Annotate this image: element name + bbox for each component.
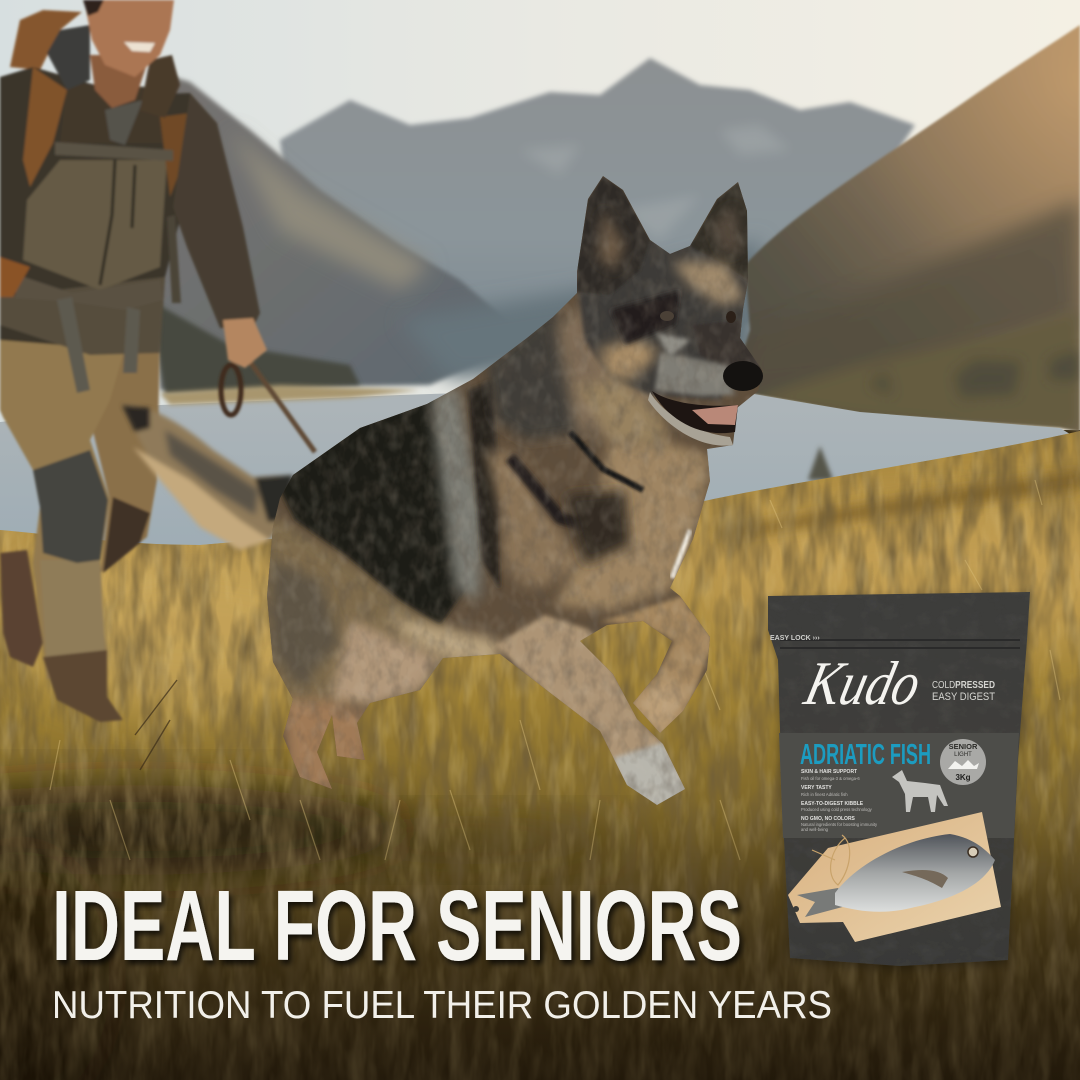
left shoreline trees [150, 300, 360, 395]
dark seed heads [135, 680, 177, 770]
shoulder dark [487, 310, 590, 440]
tail tip dark [122, 405, 150, 432]
right mountain [730, 20, 1080, 435]
head [84, 0, 174, 77]
leash [243, 352, 315, 452]
cheek tan [597, 338, 660, 380]
lower lip [648, 392, 733, 446]
knee pad [33, 450, 108, 563]
benefit 1 detail: Fish oil for omega-3 & omega-6 [801, 776, 860, 781]
lower left dark [0, 850, 110, 1080]
benefit 2: VERY TASTY [801, 785, 832, 791]
front leg [0, 330, 130, 680]
grey cheek [655, 332, 690, 358]
headline: IDEAL FOR SENIORS [52, 870, 742, 982]
easy digest tagline: EASY DIGEST [932, 691, 995, 703]
right ear inner [712, 205, 740, 255]
body base [250, 170, 780, 810]
distant mountains [280, 58, 915, 380]
benefit 3 detail: Produced using cold press technology [801, 807, 873, 812]
Kudo logo: Kudo [798, 649, 928, 718]
far ridge shadow [720, 470, 1080, 540]
smile [124, 42, 155, 52]
product pouch: Kudo Adriatic Fish [760, 590, 1035, 970]
neck [90, 55, 150, 108]
hind lower legs [283, 700, 368, 795]
collar [570, 432, 643, 490]
zip lines [780, 640, 1020, 648]
nose [723, 361, 763, 391]
benefit 4 detail: Natural ingredients for boosting immunity [801, 822, 878, 827]
dog icon [892, 770, 948, 812]
chest white edge [672, 530, 690, 578]
rump [267, 514, 450, 706]
badge dogs [948, 760, 979, 769]
dark saddle [280, 399, 465, 626]
left mountain [150, 70, 530, 390]
small tree [808, 446, 833, 480]
lower dark slope [844, 194, 1080, 352]
left eye [660, 311, 674, 321]
belt strap left [57, 297, 90, 393]
belt strap right [123, 307, 140, 373]
bright patch right [741, 522, 1080, 645]
hind thigh [330, 620, 440, 705]
front leg [495, 615, 690, 790]
hair [83, 0, 104, 16]
hanging strap [167, 215, 181, 303]
pouch texture [760, 590, 1035, 970]
benefit 4: NO GMO, NO COLORS [801, 816, 856, 822]
shadow band left [0, 785, 410, 875]
far boot [0, 550, 43, 667]
front zip [100, 160, 135, 285]
fish [797, 834, 995, 917]
upper chest [60, 83, 167, 143]
grass blades [50, 480, 1060, 860]
chest strap [55, 142, 173, 161]
benefit 3: EASY-TO-DIGEST KIBBLE [801, 801, 864, 807]
tail grey core [165, 430, 258, 515]
left strap [23, 67, 67, 187]
grey band [430, 385, 485, 600]
badge weight: 3Kg [955, 773, 971, 782]
product name: ADRIATIC FISH [800, 739, 931, 771]
fur texture light [250, 170, 780, 810]
muzzle [655, 352, 735, 396]
neck fur [555, 290, 660, 440]
senior badge [940, 739, 986, 785]
lake [0, 385, 1080, 640]
bright patch left [32, 557, 289, 728]
hood [47, 25, 90, 90]
eyes [660, 311, 736, 323]
tail fur [122, 405, 293, 550]
grass streaks dark [0, 430, 1080, 1080]
cold pressed tagline: COLDPRESSED [932, 679, 995, 691]
chest [555, 440, 712, 610]
waist belt [15, 275, 163, 310]
paw [613, 742, 690, 810]
right collar [140, 55, 180, 118]
sun glow [912, 26, 1080, 228]
fish tail [797, 888, 850, 917]
bottom darkening [0, 800, 1080, 1080]
pouch body [768, 592, 1030, 966]
shoreline hill [764, 314, 1080, 430]
belly light [385, 615, 500, 665]
far leg [87, 340, 160, 573]
benefit list [801, 769, 878, 832]
sky [0, 0, 1080, 430]
hiker [0, 0, 315, 722]
tail [122, 405, 293, 550]
fish body [835, 834, 995, 912]
subheadline: NUTRITION TO FUEL THEIR GOLDEN YEARS [52, 984, 832, 1027]
middle valley [400, 240, 760, 380]
distant trees [870, 350, 1080, 398]
herb twine [812, 835, 850, 885]
dark eye band [610, 290, 680, 345]
label band [779, 733, 1019, 838]
benefit 2 detail: Rich in finest Adriatic fish [801, 792, 848, 797]
boot [43, 650, 123, 722]
torso [0, 67, 190, 353]
tongue [692, 405, 738, 425]
fish eye [968, 847, 978, 857]
right ear [690, 182, 750, 281]
board hole [793, 906, 799, 912]
mouth [652, 391, 738, 433]
hand [223, 318, 267, 368]
snout top [693, 320, 762, 370]
right eye [726, 311, 736, 323]
fish fin [902, 870, 948, 888]
shirt [105, 100, 143, 145]
arm [173, 93, 260, 328]
benefit 1: SKIN & HAIR SUPPORT [801, 769, 857, 775]
badge senior: SENIOR [949, 742, 978, 751]
dark stripe [468, 380, 500, 590]
grass streaks light [0, 430, 1080, 1080]
fur texture dark [250, 170, 780, 810]
jacket lower panel [0, 277, 165, 355]
right strap [160, 113, 190, 197]
badge circle [940, 739, 986, 785]
easy lock label: EASY LOCK ››› [770, 635, 820, 642]
grass shadow middle [310, 815, 630, 865]
tail light fringe [133, 447, 270, 550]
right mountain clipped scene [730, 20, 1080, 435]
shoulder tan [485, 449, 585, 590]
inner left ear [598, 210, 625, 270]
throat tan [575, 380, 665, 445]
chest dark patch [565, 490, 630, 565]
raised paw [633, 680, 690, 735]
snow highlights [520, 125, 790, 240]
forehead tan [672, 262, 745, 305]
dog body [250, 170, 780, 810]
leash loop [221, 365, 241, 415]
far knee pad [103, 497, 150, 573]
lower leg light [40, 560, 105, 672]
hip pad [0, 257, 30, 297]
left mountain light slope [230, 130, 430, 290]
left ear [577, 176, 650, 295]
badge light: LIGHT [954, 752, 972, 758]
jacket light panel [23, 160, 167, 290]
meadow [0, 430, 1080, 1080]
benefit 4 detail line 2: and well-being [801, 827, 829, 832]
sandy shore [160, 385, 420, 405]
mountain slope [730, 20, 1080, 435]
head base [577, 240, 750, 400]
meadow base colour [0, 431, 1080, 1002]
raised leg [600, 596, 715, 738]
dark diagonal [503, 452, 580, 530]
dog [122, 170, 780, 810]
backpack top [10, 10, 82, 70]
tail root dark [255, 475, 293, 522]
hip grey [270, 560, 340, 690]
cutting board [788, 812, 1001, 942]
